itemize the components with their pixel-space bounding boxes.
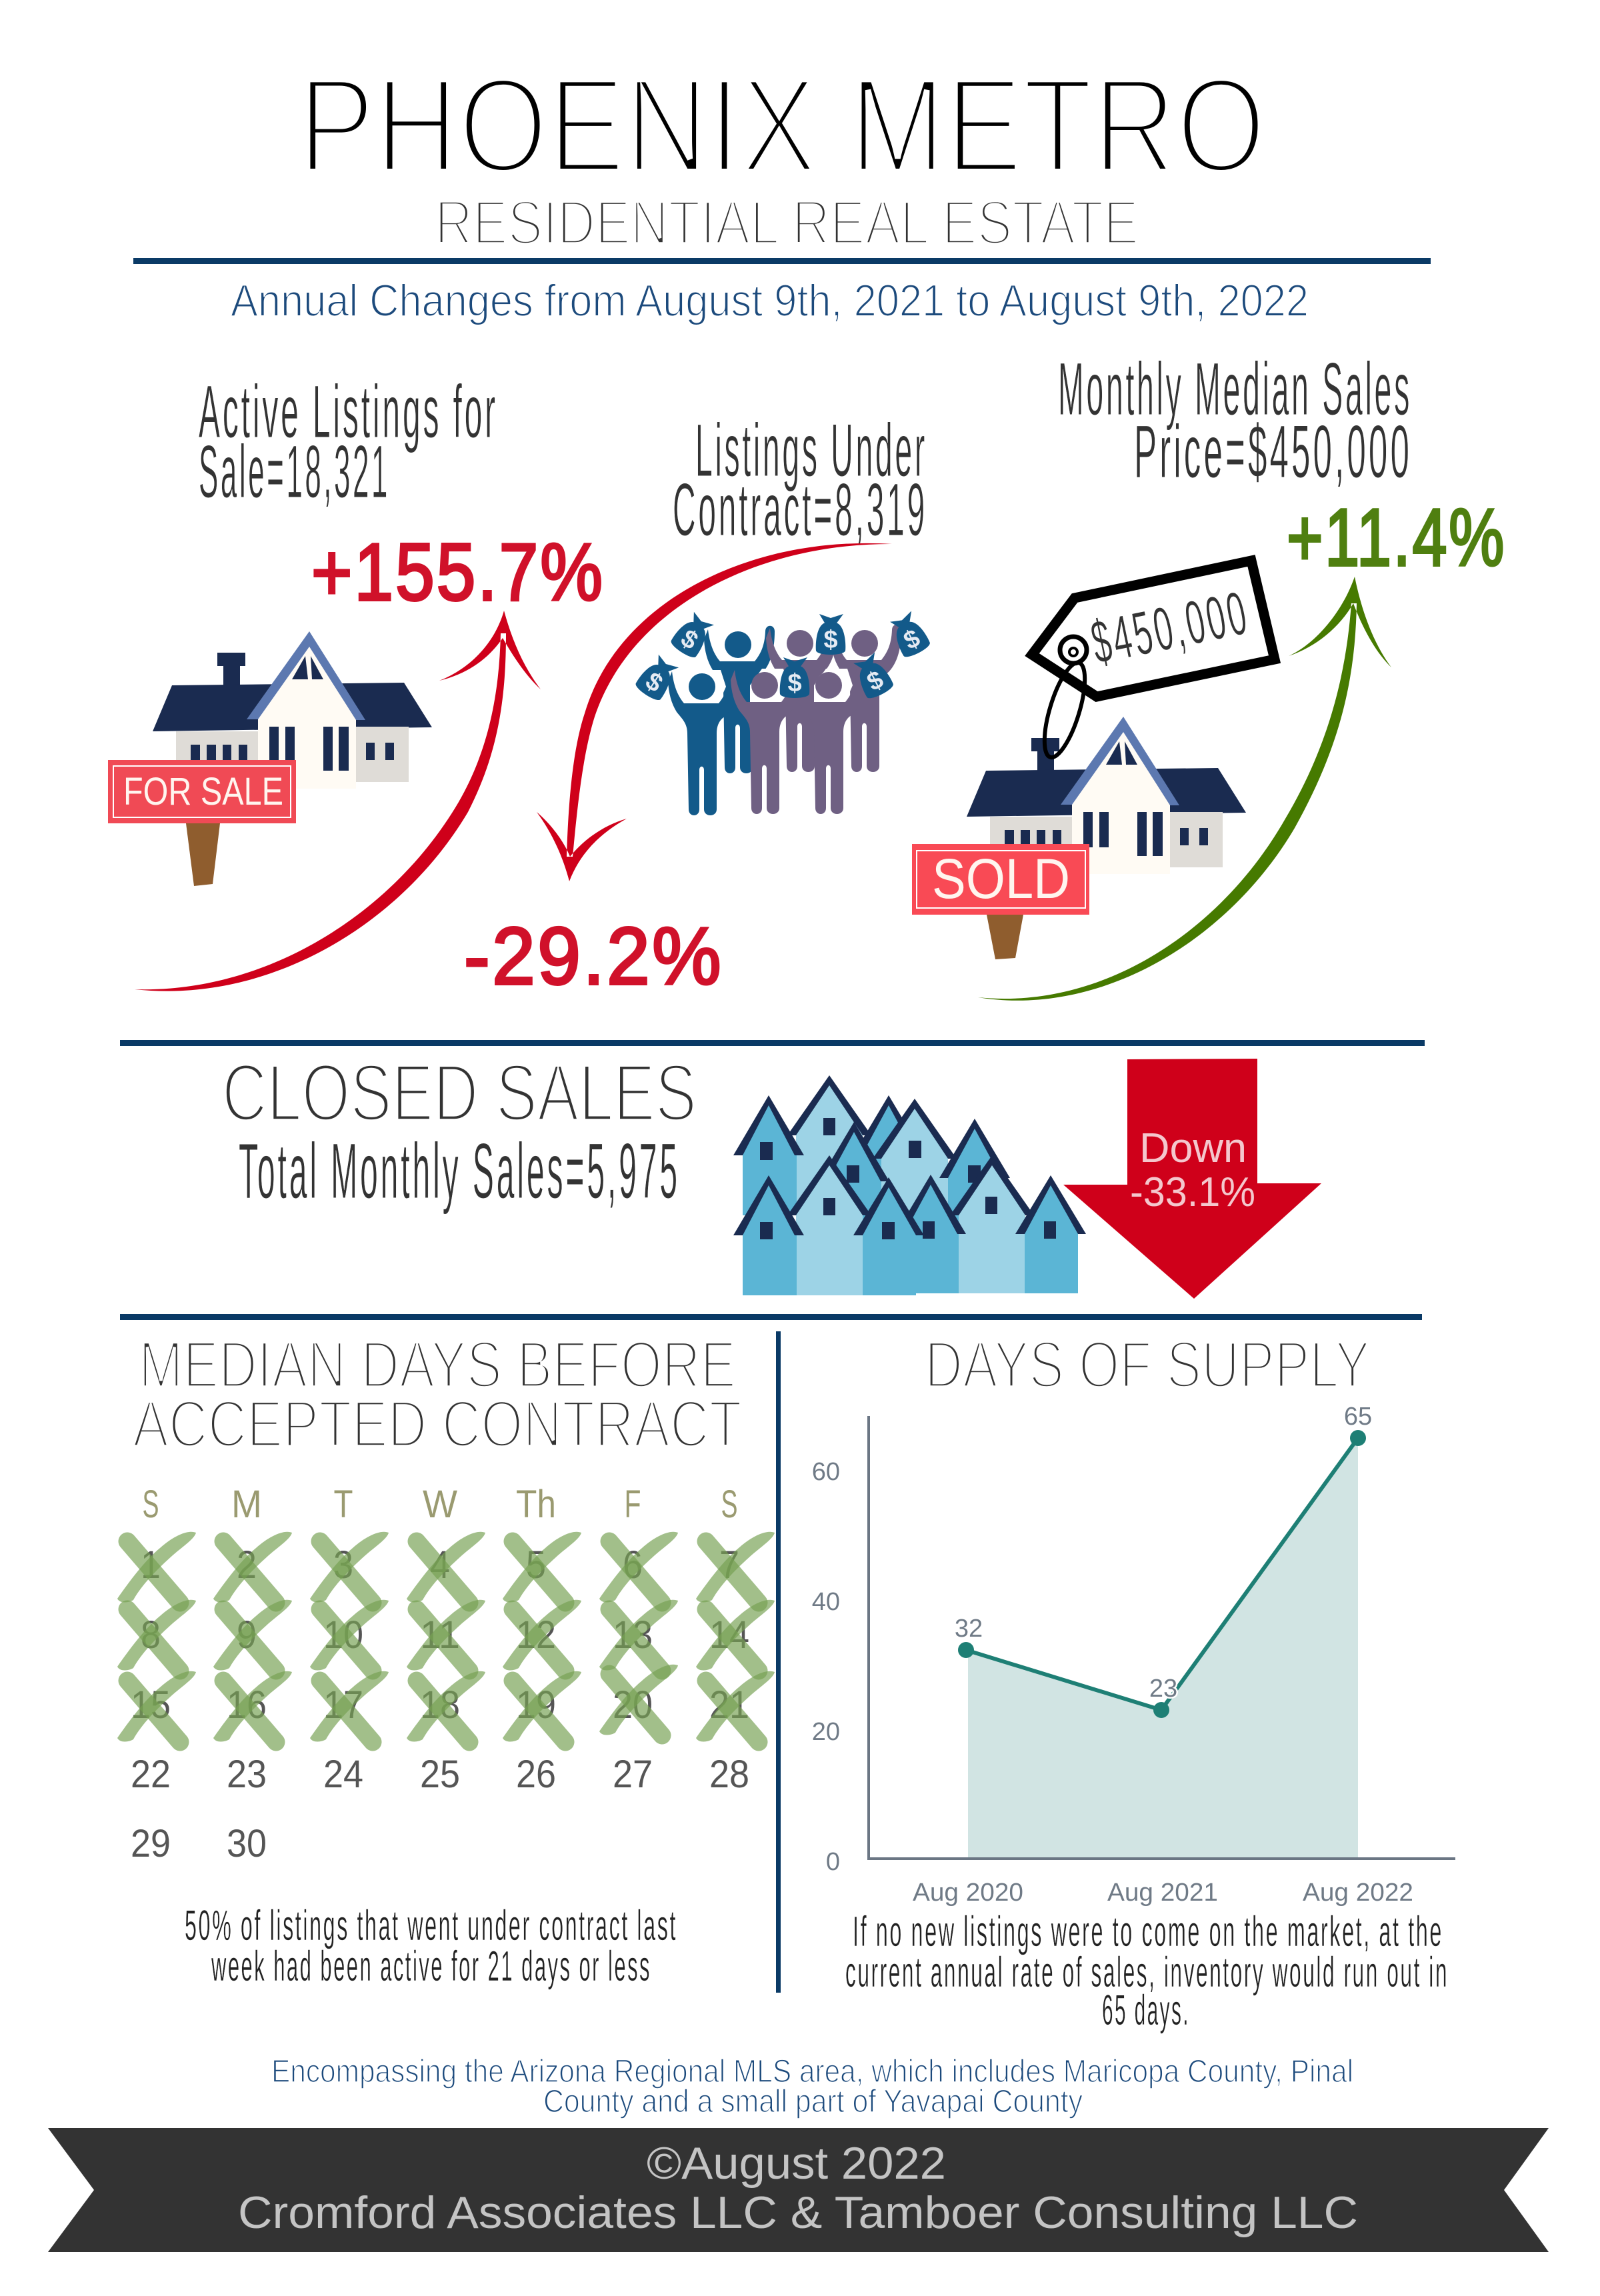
calendar: 4 <box>430 1543 450 1587</box>
calendar: 9 <box>237 1613 257 1657</box>
calendar: 30 <box>227 1822 267 1865</box>
calendar: 28 <box>709 1753 749 1796</box>
for sale sign <box>108 760 296 823</box>
active listings label: Sale=18,321 <box>199 430 390 513</box>
under contract label <box>673 409 927 551</box>
area line chart: 0 <box>826 1848 840 1876</box>
percent change +11.4%: +11.4% <box>1287 492 1506 583</box>
footnote: County and a small part of Yavapai County <box>543 2084 1083 2119</box>
icon: group of houses <box>733 1075 1086 1295</box>
for sale sign: FOR SALE <box>123 770 283 813</box>
calendar: W <box>423 1483 457 1526</box>
panel: listings under contract <box>464 409 932 1001</box>
banner: copyright: Cromford Associates LLC & Tamboer Consulting LLC <box>238 2187 1358 2238</box>
title: PHOENIX METRO <box>298 50 1266 201</box>
calendar: 6 <box>623 1543 643 1587</box>
sign post <box>987 915 1023 959</box>
area line chart: Aug 2022 <box>1303 1879 1413 1907</box>
subtitle: RESIDENTIAL REAL ESTATE <box>435 187 1139 257</box>
calendar: 23 <box>227 1753 267 1796</box>
calendar: 21 <box>709 1683 749 1727</box>
icon: people with money bags: $ <box>641 667 667 698</box>
area line chart: Aug 2020 <box>913 1879 1023 1907</box>
area line chart: 60 <box>812 1458 840 1486</box>
active listings label <box>199 370 498 513</box>
calendar: 16 <box>227 1683 267 1727</box>
calendar: 17 <box>323 1683 363 1727</box>
heading: median days: MEDIAN DAYS BEFORE <box>139 1327 736 1401</box>
calendar: T <box>333 1483 353 1526</box>
calendar: 22 <box>131 1753 171 1796</box>
calendar <box>117 1483 775 1865</box>
calendar: 29 <box>131 1822 171 1865</box>
calendar: 2 <box>237 1543 257 1587</box>
note: 50% of listings: week had been active for 21 days or less <box>211 1942 651 1990</box>
panel: days of supply <box>812 1327 1455 2034</box>
calendar: 7 <box>719 1543 739 1587</box>
icon: people with money bags: $ <box>899 624 925 655</box>
note: inventory run out: 65 days. <box>1102 1986 1190 2034</box>
footnote <box>271 2054 1353 2119</box>
percent change +155.7%: +155.7% <box>311 527 605 617</box>
icon: people with money bags: $ <box>787 669 802 697</box>
panel: closed sales: Total Monthly Sales=5,975 <box>239 1127 680 1215</box>
calendar: 25 <box>420 1753 460 1796</box>
note: inventory run out <box>845 1907 1449 2034</box>
text: Contract=8,319 <box>673 468 927 551</box>
panel: median days before accepted contract <box>117 1327 775 1990</box>
heading: median days: ACCEPTED CONTRACT <box>133 1387 742 1461</box>
arrow: big down with label <box>1063 1059 1321 1299</box>
panel: median sales price <box>912 347 1506 1001</box>
calendar: 14 <box>709 1613 749 1657</box>
calendar: 8 <box>141 1613 161 1657</box>
icon: house sold <box>912 717 1246 959</box>
calendar: Th <box>516 1483 556 1526</box>
calendar: 26 <box>516 1753 556 1796</box>
calendar: 1 <box>141 1543 161 1587</box>
calendar: S <box>721 1483 737 1526</box>
icon: people with money bags: $ <box>823 626 838 654</box>
arrow: big down with label: -33.1% <box>1130 1169 1255 1215</box>
calendar: 12 <box>516 1613 556 1657</box>
percent change -29.2%: -29.2% <box>464 911 723 1001</box>
sold sign: SOLD <box>932 847 1070 910</box>
arrow: up green <box>978 577 1391 1001</box>
icon: price tag <box>1032 561 1275 761</box>
area line chart: 40 <box>812 1588 840 1616</box>
banner: copyright <box>48 2128 1549 2252</box>
icon: people with money bags: $ <box>863 665 888 697</box>
icon: people with money bags: $ <box>676 624 703 655</box>
panel: active listings: Active Listings for <box>199 370 498 453</box>
icon: price tag: $450,000 <box>1086 579 1255 677</box>
arrow: up red <box>135 611 541 991</box>
area line chart: 32 <box>955 1615 983 1643</box>
sign post <box>186 823 220 886</box>
area line chart <box>812 1403 1455 1907</box>
calendar: 10 <box>323 1613 363 1657</box>
calendar: F <box>624 1483 641 1526</box>
area line chart: 20 <box>812 1718 840 1746</box>
panel: active listings <box>108 370 605 991</box>
note: 50% of listings: 50% of listings that went under contract last <box>185 1901 677 1949</box>
closed sales heading: CLOSED SALES <box>222 1047 697 1138</box>
area line chart: 23 <box>1149 1675 1177 1703</box>
calendar: M <box>231 1483 262 1526</box>
date range heading: Annual Changes from August 9th, 2021 to August 9th, 2022 <box>231 275 1309 326</box>
calendar: 19 <box>516 1683 556 1727</box>
calendar: 24 <box>323 1753 363 1796</box>
arrow: big down with label: Down <box>1139 1125 1247 1171</box>
calendar: 3 <box>333 1543 353 1587</box>
calendar: S <box>143 1483 159 1526</box>
median price label <box>1058 347 1412 493</box>
arrow: down red <box>537 543 892 881</box>
calendar: 20 <box>613 1683 653 1727</box>
text: Listings Under <box>695 409 927 492</box>
calendar: 11 <box>420 1613 460 1657</box>
calendar: 27 <box>613 1753 653 1796</box>
calendar: 18 <box>420 1683 460 1727</box>
heading: days of supply: DAYS OF SUPPLY <box>925 1327 1370 1401</box>
footnote: Encompassing the Arizona Regional MLS area, which includes Maricopa County, Pinal <box>271 2054 1353 2089</box>
heading: median days <box>133 1327 742 1461</box>
banner: copyright: ©August 2022 <box>647 2138 946 2189</box>
note: 50% of listings <box>185 1901 677 1990</box>
area line chart: 65 <box>1344 1403 1372 1431</box>
calendar: 15 <box>131 1683 171 1727</box>
area line chart: Aug 2021 <box>1107 1879 1218 1907</box>
calendar: 13 <box>613 1613 653 1657</box>
panel: closed sales <box>222 1047 1321 1299</box>
calendar: 5 <box>526 1543 546 1587</box>
icon: house for sale <box>108 631 432 886</box>
icon: people with money bags <box>633 610 932 815</box>
